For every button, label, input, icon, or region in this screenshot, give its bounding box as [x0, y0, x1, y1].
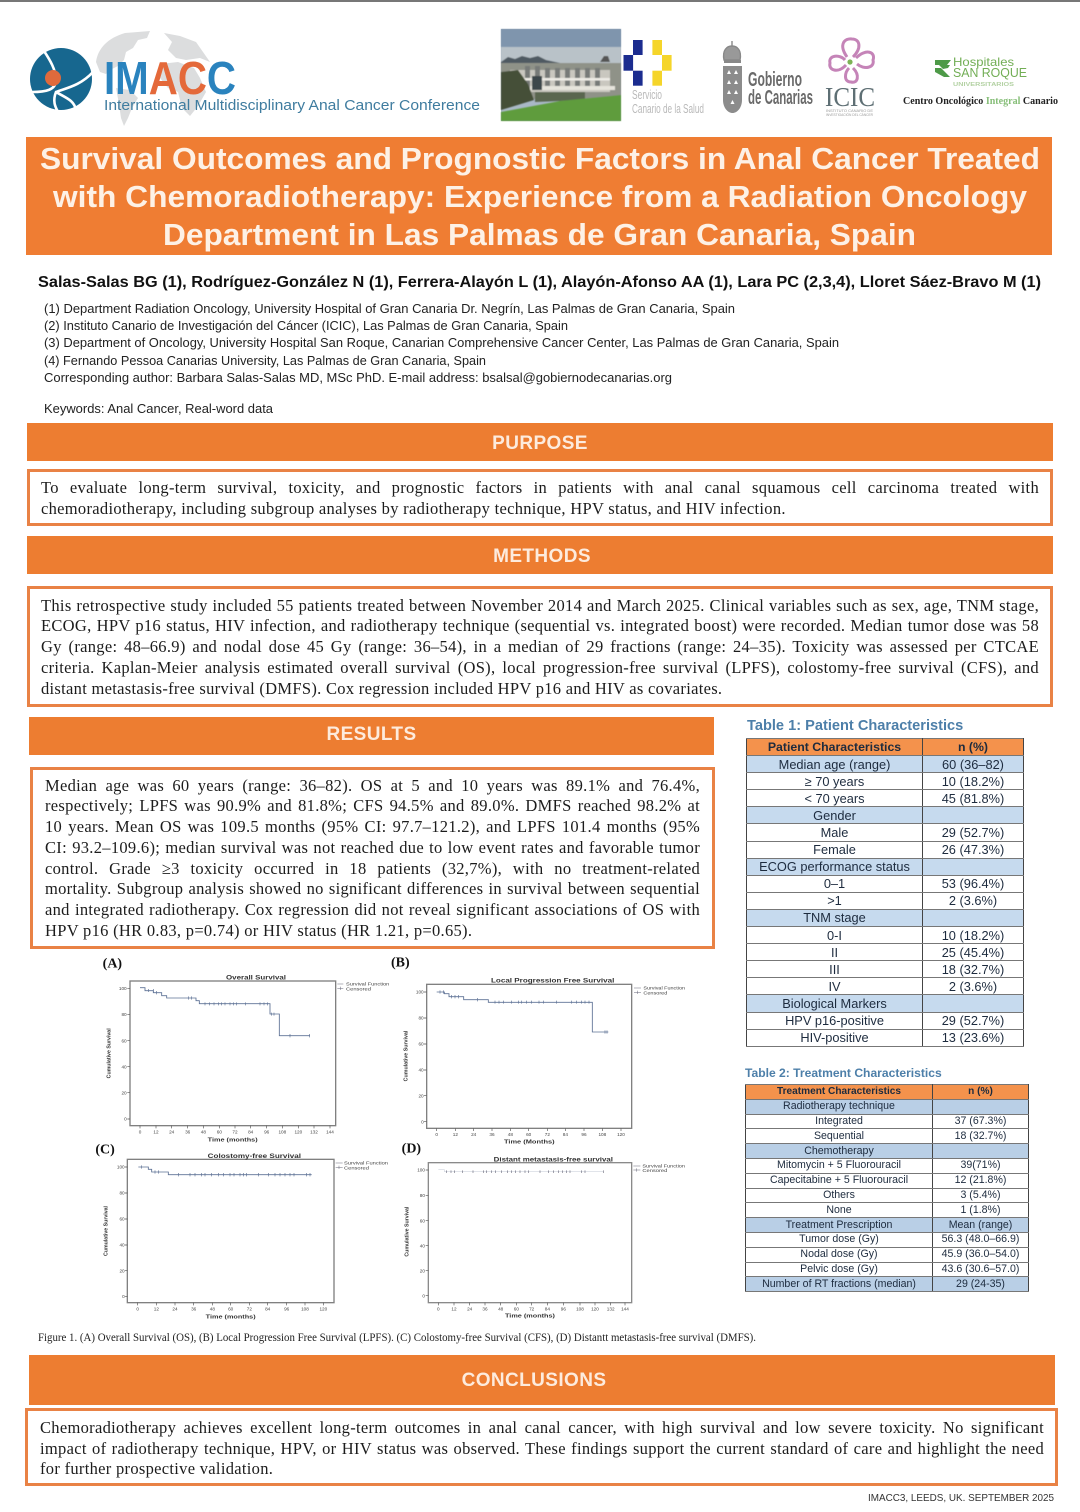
table 2: treatment characteristics: Tumor dose (Gy) — [799, 1233, 879, 1245]
table 1: patient characteristics: II — [831, 945, 838, 960]
table 2: treatment characteristics: Treatment Prescription — [786, 1219, 892, 1231]
table 2: treatment characteristics: 43.6 (30.6–57.0) — [942, 1263, 1019, 1275]
chart C: colostomy-free survival: 24 — [172, 1307, 178, 1312]
chart C: colostomy-free survival: 48 — [210, 1307, 215, 1312]
chart C: colostomy-free survival: 0 — [122, 1294, 125, 1299]
chart B: local progression free survival: 84 — [563, 1132, 568, 1137]
table 1: patient characteristics: ECOG performance status — [759, 859, 910, 874]
chart D: distant metastasis-free survival: 12 — [451, 1306, 457, 1311]
affiliations: Corresponding author: Barbara Salas-Salas MD, MSc PhD. E-mail address: bsalsal@gobiernodecanarias.org — [44, 371, 672, 385]
chart D: distant metastasis-free survival: Censored — [642, 1168, 668, 1174]
table 1: patient characteristics: 29 (52.7%) — [942, 1013, 1004, 1028]
chart D: distant metastasis-free survival: 40 — [420, 1243, 425, 1248]
chart A: overall survival: Time (months) — [208, 1137, 258, 1143]
title banner — [26, 137, 1052, 255]
table 2: treatment characteristics: 18 (32.7%) — [955, 1130, 1006, 1142]
table 1 title: Table 1: Patient Characteristics — [747, 718, 963, 734]
logo: Hospitales San Roque: SAN ROQUE — [953, 66, 1027, 80]
chart D: distant metastasis-free survival: 84 — [545, 1306, 550, 1311]
chart B: local progression free survival: 60 — [418, 1042, 424, 1047]
table 1: patient characteristics: < 70 years — [804, 791, 865, 806]
table 2: treatment characteristics: 3 (5.4%) — [960, 1189, 1001, 1201]
table 1: patient characteristics: 10 (18.2%) — [942, 928, 1004, 943]
panel: results: respectively; LPFS was 90.9% and 81.8%; CFS 94.5% and 89.0%. DMFS reached 98.2% at — [45, 796, 700, 815]
chart D: distant metastasis-free survival: 48 — [498, 1306, 504, 1311]
chart A: overall survival: 144 — [326, 1129, 334, 1134]
authors and affiliations — [38, 274, 1041, 416]
chart B: local progression free survival: 24 — [471, 1132, 477, 1137]
chart C: colostomy-free survival: 108 — [301, 1307, 309, 1312]
table 1: patient characteristics: III — [829, 962, 840, 977]
chart C: colostomy-free survival: 60 — [228, 1307, 234, 1312]
title banner: Survival Outcomes and Prognostic Factors in Anal Cancer Treated — [40, 141, 1040, 176]
table 2: treatment characteristics: n (%) — [968, 1086, 993, 1097]
chart A: overall survival: 96 — [264, 1129, 270, 1134]
table 1: patient characteristics: TNM stage — [803, 910, 866, 925]
panel: purpose: To evaluate long-term survival, toxicity, and prognostic factors in patients with anal canal squamous cell carcinoma treated with — [41, 478, 1039, 497]
chart D: distant metastasis-free survival: 20 — [420, 1268, 425, 1273]
chart A: overall survival: 0 — [124, 1117, 127, 1122]
chart D: distant metastasis-free survival: 144 — [621, 1306, 629, 1311]
chart B: local progression free survival: 72 — [545, 1132, 550, 1137]
panel: conclusions: impact of radiotherapy technique, HPV, or HIV status was observed. These findings support the current standard of care and highlight the need — [40, 1439, 1044, 1458]
chart C: colostomy-free survival: 36 — [191, 1307, 197, 1312]
panel: methods: criteria. Kaplan-Meier analysis estimated overall survival (OS), local progression-free survival (LPFS), colostomy-free survival (CFS), and — [41, 658, 1039, 677]
chart B: local progression free survival: 40 — [418, 1068, 424, 1073]
chart C: colostomy-free survival: Censored — [344, 1165, 369, 1171]
chart A: overall survival: 100 — [119, 986, 127, 991]
panel: results: control. Grade ≥3 toxicity occurred in 18 patients (32,7%), with no treatment-related — [45, 859, 700, 878]
table 1: patient characteristics: 0–1 — [824, 876, 845, 891]
table 2: treatment characteristics: 12 (21.8%) — [955, 1174, 1006, 1186]
panel: methods — [27, 586, 1053, 707]
chart A: overall survival: Overall Survival — [226, 975, 286, 981]
logo: Hospitales San Roque — [903, 55, 1058, 107]
table 2: treatment characteristics: 37 (67.3%) — [955, 1115, 1006, 1127]
affiliations: (2) Instituto Canario de Investigación del Cáncer (ICIC), Las Palmas de Gran Canaria, Spain — [44, 319, 568, 333]
logo: ICIC: INSTITUTO CANARIO DE — [826, 109, 874, 113]
chart D: distant metastasis-free survival: 60 — [420, 1218, 425, 1223]
table 2: treatment characteristics: Radiotherapy technique — [783, 1100, 895, 1112]
chart A: overall survival: 60 — [121, 1038, 127, 1043]
table 1: patient characteristics: 25 (45.4%) — [942, 945, 1004, 960]
table 2: treatment characteristics: Mean (range) — [949, 1219, 1012, 1231]
chart A: overall survival: 80 — [121, 1012, 127, 1017]
chart B: local progression free survival: 36 — [489, 1132, 495, 1137]
panel: results: HPV p16 (HR 0.83, p=0.74) or HIV status (HR 1.21, p=0.65). — [45, 921, 472, 940]
panel: conclusions: for further prospective validation. — [40, 1459, 273, 1478]
logo: ICIC: ICIC — [825, 82, 875, 112]
keywords: Keywords: Anal Cancer, Real-word data — [44, 402, 273, 416]
chart B: local progression free survival: 0 — [421, 1119, 424, 1124]
chart A: overall survival: 12 — [153, 1129, 159, 1134]
logo: Hospitales San Roque: Centro Oncológico Integral Canario — [903, 96, 1058, 107]
chart D: distant metastasis-free survival: 0 — [422, 1293, 425, 1298]
chart D: distant metastasis-free survival: 60 — [514, 1306, 519, 1311]
chart C: colostomy-free survival: 40 — [119, 1243, 125, 1248]
chart B: local progression free survival: Censored — [643, 990, 668, 996]
chart D: distant metastasis-free survival: Cumulative Survival — [404, 1206, 410, 1257]
photo: hospital building — [501, 29, 621, 121]
chart A: overall survival: Cumulative Survival — [107, 1028, 113, 1078]
table 1: patient characteristics: Patient Characteristics — [768, 740, 901, 754]
chart A: overall survival: 120 — [294, 1129, 303, 1134]
chart D: distant metastasis-free survival: Time (months) — [505, 1313, 555, 1319]
chart C: colostomy-free survival: 80 — [119, 1191, 125, 1196]
chart C: colostomy-free survival: 96 — [284, 1307, 290, 1312]
panel: results: Median age was 60 years (range: 36–82). OS at 5 and 10 years was 89.1% and 76.4%, — [45, 776, 700, 795]
chart D: distant metastasis-free survival: Distant metastasis-free survival — [494, 1157, 613, 1163]
chart C: colostomy-free survival: Colostomy-free Survival — [208, 1154, 301, 1160]
affiliations: (4) Fernando Pessoa Canarias University, Las Palmas de Gran Canaria, Spain — [44, 354, 486, 368]
table 2: treatment characteristics: Integrated — [815, 1115, 863, 1127]
footer note: IMACC3, LEEDS, UK. SEPTEMBER 2025 — [868, 1492, 1054, 1504]
panel: methods: Gy (range: 48–66.9) and nodal dose 45 Gy (range: 36–54), in a median of 29 fractions (range: 24–35). Toxicity was assessed per CTCAE — [41, 637, 1039, 656]
table 1: patient characteristics: 53 (96.4%) — [942, 876, 1004, 891]
chart D: distant metastasis-free survival: 108 — [576, 1306, 584, 1311]
chart A: overall survival: 24 — [169, 1129, 175, 1134]
table 1: patient characteristics: >1 — [827, 893, 842, 908]
chart D: distant metastasis-free survival: 0 — [437, 1306, 440, 1311]
chart B: local progression free survival: Time (Months) — [504, 1140, 555, 1146]
heading: methods: METHODS — [493, 546, 591, 566]
chart A: overall survival: Censored — [346, 986, 371, 992]
chart A: overall survival: 48 — [201, 1129, 206, 1134]
table 1: patient characteristics: 2 (3.6%) — [949, 893, 997, 908]
chart B: local progression free survival: 108 — [598, 1132, 607, 1137]
table 2: treatment characteristics: None — [826, 1204, 852, 1216]
affiliations: (3) Department of Oncology, University Hospital San Roque, Canarian Comprehensive Cancer Center, Las Palmas de Gran Canaria, Spain — [44, 336, 839, 350]
logo: Gobierno de Canarias: Gobierno — [748, 69, 802, 91]
chart B: local progression free survival: 120 — [617, 1132, 625, 1137]
heading: conclusions — [29, 1355, 1055, 1405]
heading: conclusions: CONCLUSIONS — [462, 1370, 606, 1390]
chart C: colostomy-free survival: (C) — [95, 1142, 115, 1157]
table 2: treatment characteristics — [745, 1084, 1029, 1292]
table 1: patient characteristics: Median age (range) — [779, 757, 890, 772]
chart B: local progression free survival: 20 — [418, 1093, 424, 1098]
table 1: patient characteristics: Gender — [813, 808, 856, 823]
table 2: treatment characteristics: 39(71%) — [960, 1159, 1001, 1171]
panel: methods: distant metastasis-free survival (DMFS). Cox regression included HPV p16 and HIV as covariates. — [41, 679, 722, 698]
logo wordmark: IMACC — [104, 52, 236, 104]
logo: ICIC: INVESTIGACIÓN DEL CÁNCER — [826, 112, 873, 117]
table 2: treatment characteristics: Treatment Characteristics — [777, 1086, 901, 1097]
chart A: overall survival: (A) — [103, 956, 122, 971]
chart A: overall survival: 36 — [185, 1129, 191, 1134]
table 1: patient characteristics: IV — [828, 979, 841, 994]
chart C: colostomy-free survival: Time (months) — [206, 1314, 256, 1320]
panel: results: and integrated radiotherapy. Cox regression did not reveal significant associations of OS with — [45, 900, 700, 919]
table 1: patient characteristics: 2 (3.6%) — [949, 979, 997, 994]
chart A: overall survival: 0 — [139, 1129, 142, 1134]
logo: Servicio Canario de la Salud — [624, 40, 704, 116]
panel: purpose: chemoradiotherapy, including subgroup analyses by radiotherapy technique, HPV status, and HIV infection. — [41, 499, 786, 518]
table 1: patient characteristics: HPV p16-positive — [785, 1013, 884, 1028]
chart D: distant metastasis-free survival: (D) — [402, 1142, 421, 1157]
heading: results — [29, 717, 714, 755]
chart C: colostomy-free survival: Cumulative Survival — [103, 1205, 109, 1256]
chart B: local progression free survival: Local Progression Free Survival — [491, 979, 615, 985]
affiliations — [44, 302, 839, 385]
table 1: patient characteristics: 18 (32.7%) — [942, 962, 1004, 977]
chart D: distant metastasis-free survival: 24 — [467, 1306, 473, 1311]
chart A: overall survival: 84 — [248, 1129, 254, 1134]
chart D: distant metastasis-free survival — [402, 1142, 685, 1319]
chart B: local progression free survival — [391, 956, 685, 1146]
chart B: local progression free survival: 12 — [453, 1132, 458, 1137]
table 2: treatment characteristics: Number of RT fractions (median) — [762, 1278, 916, 1290]
table 1: patient characteristics: HIV-positive — [800, 1030, 869, 1045]
chart A: overall survival: 132 — [310, 1129, 318, 1134]
title banner: Department in Las Palmas de Gran Canaria, Spain — [163, 217, 916, 252]
affiliations: (1) Department Radiation Oncology, University Hospital of Gran Canaria Dr. Negrín, Las Palmas de Gran Canaria, Spain — [44, 302, 735, 316]
figure 1: survival curves — [95, 956, 685, 1320]
table 1: patient characteristics: 13 (23.6%) — [942, 1030, 1004, 1045]
table 2: treatment characteristics: 45.9 (36.0–54.0) — [942, 1248, 1019, 1260]
table 1: patient characteristics: n (%) — [958, 740, 988, 754]
logo: Gobierno de Canarias: de Canarias — [748, 87, 813, 109]
icon: world map — [96, 31, 210, 126]
panel: results: CI: 93.2–109.6); median survival was not reached due to low event rates and favorable tumor — [45, 838, 700, 857]
heading: results: RESULTS — [326, 724, 417, 744]
chart A: overall survival — [103, 956, 390, 1143]
chart D: distant metastasis-free survival: 132 — [607, 1306, 615, 1311]
chart C: colostomy-free survival: 84 — [265, 1307, 271, 1312]
chart D: distant metastasis-free survival: Survival Function — [642, 1164, 685, 1170]
logo: Gobierno de Canarias — [723, 41, 813, 113]
panel: conclusions — [25, 1408, 1058, 1486]
chart A: overall survival: 60 — [217, 1129, 222, 1134]
chart A: overall survival: 20 — [121, 1090, 127, 1095]
logo: Hospitales San Roque: UNIVERSITARIOS — [953, 82, 1014, 88]
logo: IMACC conference — [30, 31, 480, 126]
chart C: colostomy-free survival: 20 — [119, 1268, 125, 1273]
heading: methods — [27, 536, 1053, 574]
chart C: colostomy-free survival: 100 — [117, 1165, 125, 1170]
table 1: patient characteristics — [746, 738, 1024, 1047]
chart D: distant metastasis-free survival: 36 — [482, 1306, 488, 1311]
chart A: overall survival: 40 — [121, 1064, 127, 1069]
chart C: colostomy-free survival: 60 — [119, 1217, 125, 1222]
panel: methods: ECOG, HPV p16 status, HIV infection, and radiotherapy technique (sequential vs. integrated boost) were recorded. Median tumor dose was 58 — [41, 616, 1039, 635]
chart C: colostomy-free survival: 72 — [247, 1307, 252, 1312]
title banner: with Chemoradiotherapy: Experience from a Radiation Oncology — [52, 179, 1028, 214]
chart B: local progression free survival: Cumulative Survival — [404, 1030, 410, 1081]
table 2: treatment characteristics: Sequential — [814, 1130, 864, 1142]
chart B: local progression free survival: (B) — [391, 956, 410, 971]
panel: results: mortality. Subgroup analysis showed no significant differences in survival between sequential — [45, 879, 700, 898]
logo: Hospitales San Roque: Hospitales — [953, 55, 1014, 69]
panel: results — [30, 767, 715, 949]
logo subtitle: International Multidisciplinary Anal Cancer Conference — [104, 97, 480, 114]
heading: purpose: PURPOSE — [492, 433, 588, 454]
panel: methods: This retrospective study included 55 patients treated between November 2014 and March 2025. Clinical variables such as sex, age, TNM stage, — [41, 596, 1039, 615]
header logos — [30, 28, 1058, 126]
chart A: overall survival: Survival Function — [346, 982, 390, 988]
chart D: distant metastasis-free survival: 80 — [420, 1193, 425, 1198]
table 2: treatment characteristics: 56.3 (48.0–66.9) — [942, 1233, 1019, 1245]
chart B: local progression free survival: 96 — [581, 1132, 587, 1137]
chart B: local progression free survival: 80 — [418, 1016, 424, 1021]
chart C: colostomy-free survival: 120 — [319, 1307, 328, 1312]
table 1: patient characteristics: 0-I — [827, 928, 842, 943]
table 1: patient characteristics: 29 (52.7%) — [942, 825, 1004, 840]
table 1: patient characteristics: 45 (81.8%) — [942, 791, 1004, 806]
chart C: colostomy-free survival: 12 — [154, 1307, 159, 1312]
table 2: treatment characteristics: Others — [823, 1189, 855, 1201]
table 1: patient characteristics: 60 (36–82) — [942, 757, 1004, 772]
chart C: colostomy-free survival — [95, 1142, 388, 1320]
logo: Servicio Canario de la Salud: Servicio — [632, 87, 662, 102]
table 1: patient characteristics: 26 (47.3%) — [942, 842, 1004, 857]
table 2: treatment characteristics: Chemotherapy — [804, 1145, 874, 1157]
table 1: patient characteristics: Male — [821, 825, 848, 840]
heading: purpose — [27, 423, 1053, 461]
table 2: treatment characteristics: 29 (24-35) — [956, 1278, 1005, 1290]
table 2: treatment characteristics: Mitomycin + 5 Fluorouracil — [777, 1159, 901, 1171]
chart A: overall survival: 108 — [278, 1129, 287, 1134]
logo: ICIC — [825, 39, 875, 117]
icon: blue circle mark — [30, 48, 93, 112]
chart B: local progression free survival: 0 — [435, 1132, 438, 1137]
chart B: local progression free survival: 48 — [508, 1132, 513, 1137]
table 1: patient characteristics: ≥ 70 years — [805, 774, 864, 789]
panel: purpose — [27, 469, 1053, 526]
chart B: local progression free survival: Survival Function — [643, 986, 685, 992]
table 1: patient characteristics: Female — [813, 842, 856, 857]
table 2 title: Table 2: Treatment Characteristics — [745, 1066, 942, 1080]
table 2: treatment characteristics: Pelvic dose (Gy) — [800, 1263, 878, 1275]
table 1: patient characteristics: 10 (18.2%) — [942, 774, 1004, 789]
authors: Salas-Salas BG (1), Rodríguez-González N (1), Ferrera-Alayón L (1), Alayón-Afonso AA (1), Lara PC (2,3,4), Lloret Sáez-Bravo M (1) — [38, 274, 1041, 291]
chart A: overall survival: 72 — [232, 1129, 238, 1134]
chart C: colostomy-free survival: Survival Function — [344, 1161, 388, 1167]
chart D: distant metastasis-free survival: 72 — [529, 1306, 535, 1311]
panel: conclusions: Chemoradiotherapy achieves excellent long-term outcomes in anal canal cancer, with high survival and low severe toxicity. No significant — [40, 1418, 1044, 1437]
chart B: local progression free survival: 60 — [526, 1132, 532, 1137]
panel: results: 10 years. Mean OS was 109.5 months (95% CI: 97.7–121.2), and LPFS 101.4 months (95% — [45, 817, 700, 836]
chart B: local progression free survival: 100 — [416, 990, 424, 995]
chart C: colostomy-free survival: 0 — [136, 1307, 139, 1312]
chart D: distant metastasis-free survival: 100 — [417, 1168, 425, 1173]
table 2: treatment characteristics: Nodal dose (Gy) — [800, 1248, 878, 1260]
chart D: distant metastasis-free survival: 120 — [591, 1306, 599, 1311]
table 2: treatment characteristics: Capecitabine + 5 Fluorouracil — [770, 1174, 908, 1186]
table 2: treatment characteristics: 1 (1.8%) — [960, 1204, 1001, 1216]
logo: Servicio Canario de la Salud: Canario de la Salud — [632, 101, 704, 116]
chart D: distant metastasis-free survival: 96 — [561, 1306, 566, 1311]
table 1: patient characteristics: Biological Markers — [782, 996, 887, 1011]
